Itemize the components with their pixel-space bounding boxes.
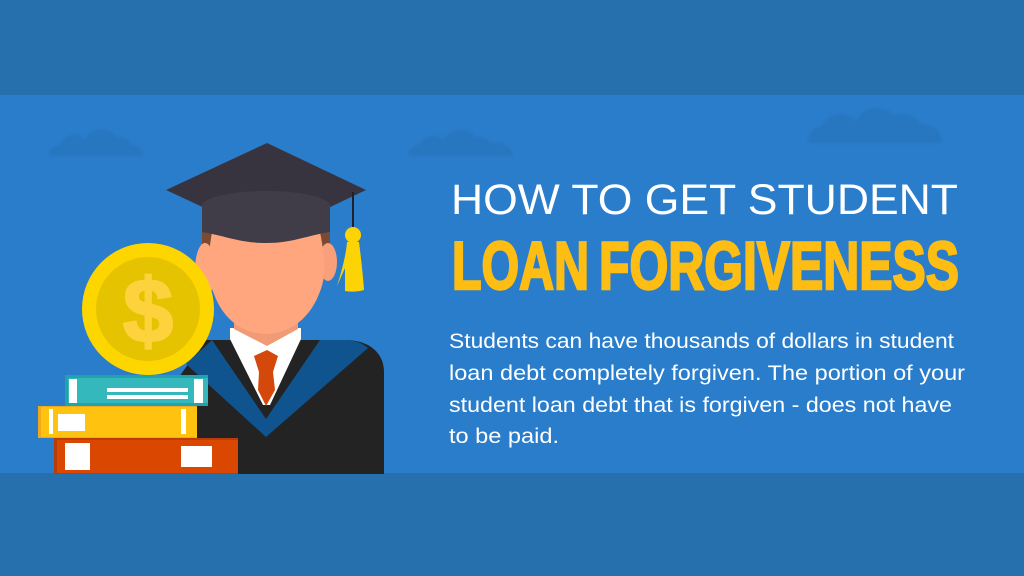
- face: [208, 232, 324, 334]
- book: orange: [54, 438, 238, 474]
- panel: bottom band: [0, 473, 1024, 576]
- icon: dollar coin: $: [123, 262, 173, 362]
- body text: to be paid.: [449, 425, 559, 448]
- tassel: [337, 227, 364, 292]
- gown: [170, 340, 384, 474]
- tassel cord: [352, 192, 354, 232]
- icon: cloud left: [49, 129, 143, 156]
- gown dark collar: [212, 340, 320, 419]
- book: yellow: [38, 406, 197, 438]
- title line 2: [452, 228, 959, 304]
- icon: cloud right: [808, 108, 942, 143]
- illustration: book stack: [38, 375, 238, 474]
- body text: [449, 330, 965, 448]
- gown blue hood: [186, 340, 368, 437]
- illustration: graduate: [166, 143, 384, 474]
- panel: top band: [0, 0, 1024, 95]
- body text: student loan debt that is forgiven - does not have: [449, 394, 952, 417]
- neck: [234, 318, 298, 346]
- shirt collar: [230, 328, 301, 405]
- hair: [202, 225, 330, 252]
- body text: loan debt completely forgiven. The portion of your: [449, 362, 965, 385]
- cap band: [202, 191, 330, 243]
- tie: [254, 350, 278, 406]
- panel: main background: [0, 95, 1024, 474]
- body text: Students can have thousands of dollars in student: [449, 330, 954, 353]
- cap top: [166, 143, 366, 237]
- ears: [195, 243, 215, 297]
- icon: cloud middle: [408, 130, 513, 156]
- book: teal: [65, 375, 208, 406]
- icon: dollar coin: [82, 243, 214, 375]
- title line 2: LOAN: [452, 228, 589, 304]
- title line 1: HOW TO GET STUDENT: [451, 176, 958, 224]
